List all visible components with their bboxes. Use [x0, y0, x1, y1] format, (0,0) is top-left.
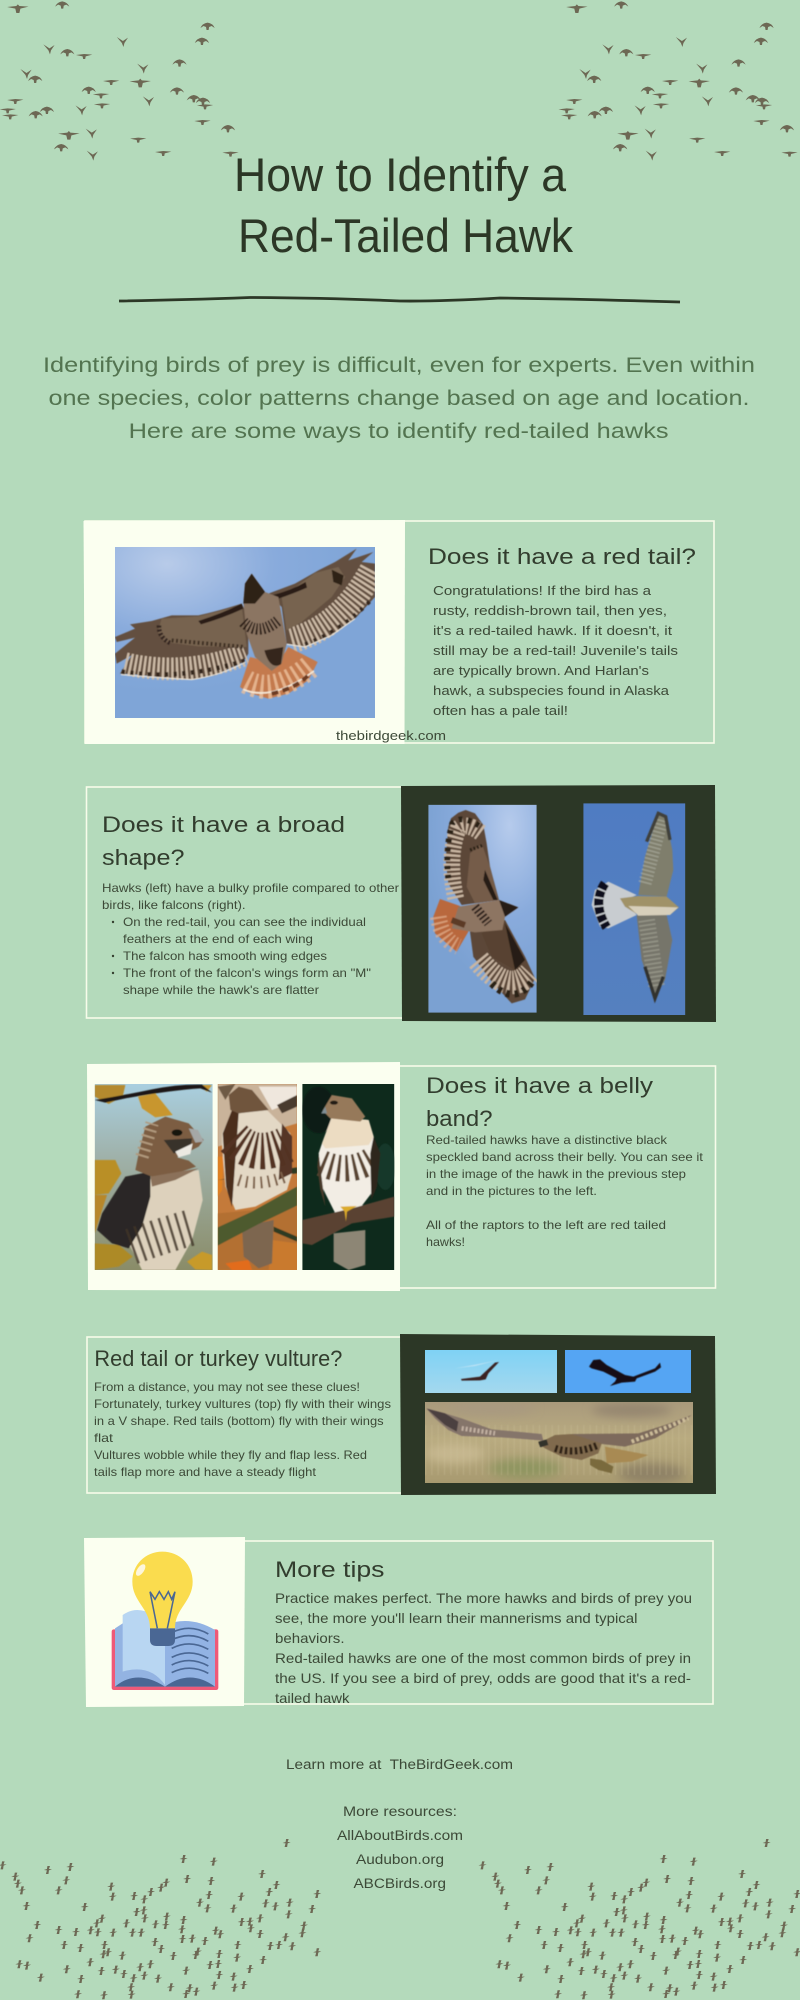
heading: Does it have a red tail?: [428, 544, 696, 569]
heading: Does it have a belly: [426, 1073, 653, 1098]
body text and bullets: feathers at the end of each wing: [123, 932, 313, 946]
intro text: Here are some ways to identify red-tailed hawks: [129, 420, 669, 443]
photo: vulture gliding in V: [425, 1350, 557, 1393]
body text: are typically brown. And Harlan's: [433, 663, 650, 678]
body text and bullets: Hawks (left) have a bulky profile compared to other: [102, 881, 399, 895]
title: Red-Tailed Hawk: [238, 209, 573, 262]
heading: [426, 1073, 653, 1131]
footer links: Audubon.org: [356, 1852, 444, 1867]
footer links: AllAboutBirds.com: [337, 1828, 463, 1843]
photo: red-tailed hawk from below: [115, 547, 375, 718]
body text: [433, 583, 679, 718]
footer links: ABCBirds.org: [354, 1876, 446, 1891]
panel: broad shape: [86, 785, 716, 1022]
title: [234, 148, 573, 262]
panel: belly band: [87, 1062, 716, 1291]
photo: hawk on dark background: [302, 1084, 394, 1270]
body text and bullets: The front of the falcon's wings form an "M": [123, 966, 371, 980]
body text: still may be a red-tail! Juvenile's tails: [433, 643, 679, 658]
footer links: Learn more at TheBirdGeek.com: [286, 1757, 513, 1772]
body text: Red-tailed hawks are one of the most common birds of prey in: [275, 1650, 691, 1666]
body text: Red-tailed hawks have a distinctive black: [426, 1133, 668, 1147]
body text: Fortunately, turkey vultures (top) fly with their wings: [94, 1397, 391, 1411]
body text: hawk, a subspecies found in Alaska: [433, 683, 670, 698]
body text: [94, 1380, 391, 1479]
body text: and in the pictures to the left.: [426, 1184, 597, 1198]
top-left bird flock: [0, 1, 239, 161]
photo: vulture black silhouette: [565, 1350, 691, 1393]
body text and bullets: [102, 881, 399, 997]
photo: red-tail flying flat over grass: [425, 1402, 693, 1483]
panel: turkey vulture: [87, 1334, 716, 1495]
intro text: Identifying birds of prey is difficult, even for experts. Even within: [43, 354, 755, 377]
photo: hawk with autumn leaves: [94, 1084, 213, 1270]
intro text: [43, 354, 755, 443]
body text: From a distance, you may not see these clues!: [94, 1380, 360, 1394]
bottom-right bird flock: [478, 1839, 800, 1999]
title: How to Identify a: [234, 148, 567, 201]
footer links: More resources:: [343, 1804, 457, 1819]
panel: red tail: [84, 520, 714, 744]
bottom-left bird flock: [0, 1839, 321, 1999]
top-right bird flock: [558, 1, 798, 161]
body text: the US. If you see a bird of prey, odds are good that it's a red-: [275, 1670, 691, 1686]
website credit: thebirdgeek.com: [336, 728, 446, 743]
heading: Does it have a broad: [102, 812, 345, 837]
body text and bullets: shape while the hawk's are flatter: [123, 983, 319, 997]
body text: tails flap more and have a steady flight: [94, 1465, 317, 1479]
photo: hawk on mossy branch: [218, 1084, 297, 1270]
heading: shape?: [102, 845, 184, 870]
heading: More tips: [275, 1557, 384, 1582]
body text: speckled band across their belly. You can see it: [426, 1150, 704, 1164]
body text: [426, 1133, 704, 1249]
body text: rusty, reddish-brown tail, then yes,: [433, 603, 667, 618]
body text and bullets: The falcon has smooth wing edges: [123, 949, 327, 963]
body text: in the image of the hawk in the previous step: [426, 1167, 686, 1181]
photo: falcon profile: [583, 803, 686, 1015]
intro text: one species, color patterns change based on age and location.: [48, 387, 750, 410]
heading: band?: [426, 1106, 492, 1131]
body text: tailed hawk: [275, 1690, 351, 1706]
body text and bullets: birds, like falcons (right).: [102, 898, 246, 912]
body text: All of the raptors to the left are red tailed: [426, 1218, 666, 1232]
body text: hawks!: [426, 1235, 465, 1249]
body text: Congratulations! If the bird has a: [433, 583, 652, 598]
body text and bullets: On the red-tail, you can see the individual: [123, 915, 366, 929]
title underline: [119, 298, 680, 302]
body text: it's a red-tailed hawk. If it doesn't, it: [433, 623, 672, 638]
body text: see, the more you'll learn their mannerisms and typical: [275, 1610, 638, 1626]
footer links: [286, 1757, 513, 1891]
body text: flat: [94, 1431, 114, 1445]
heading: Red tail or turkey vulture?: [94, 1346, 342, 1371]
body text: Practice makes perfect. The more hawks and birds of prey you: [275, 1590, 692, 1606]
body text: often has a pale tail!: [433, 703, 568, 718]
heading: [102, 812, 345, 870]
panel: more tips: [84, 1537, 713, 1707]
icon: light bulb and open book: [112, 1552, 218, 1690]
photo: hawk profile: [428, 804, 537, 1013]
body text: behaviors.: [275, 1630, 344, 1646]
body text: Vultures wobble while they fly and flap less. Red: [94, 1448, 367, 1462]
body text: [275, 1590, 692, 1706]
body text: in a V shape. Red tails (bottom) fly with their wings: [94, 1414, 384, 1428]
